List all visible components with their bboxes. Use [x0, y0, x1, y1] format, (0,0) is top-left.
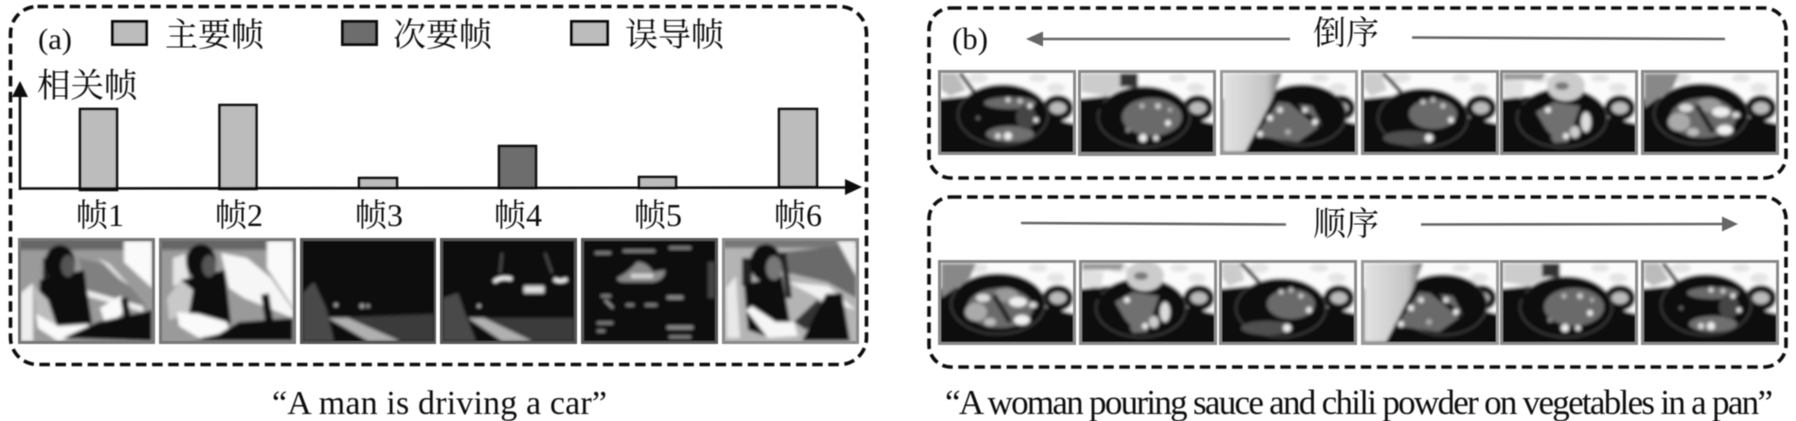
x labels: 帧4 [494, 197, 542, 233]
x labels [76, 197, 822, 233]
pan frame f5 [1500, 260, 1638, 345]
caption (a): “A man is driving a car” [272, 385, 607, 421]
panel (b): forward order [929, 197, 1786, 367]
video frames: driving [18, 238, 859, 344]
dashed panel border (b, reverse) [929, 8, 1786, 178]
legend text: misleading frame: 误导帧 [625, 17, 725, 54]
legend [112, 17, 725, 54]
frame thumbnail 1 [18, 238, 155, 344]
x labels: 帧6 [774, 197, 822, 233]
x labels: 帧2 [215, 197, 263, 233]
bar: frame 5 [639, 177, 676, 188]
panel (a): related frames chart [10, 6, 866, 364]
bar: frame 4 [499, 146, 536, 188]
x labels: 帧5 [634, 197, 682, 233]
x axis arrow [19, 179, 862, 195]
line: right segment [1412, 38, 1725, 39]
frame strip: forward [938, 260, 1779, 345]
caption (b): “A woman pouring sauce and chili powder on vegetables in a pan” [945, 383, 1773, 421]
bar: frame 6 [779, 109, 817, 187]
heading: reverse order: 倒序 [1313, 15, 1379, 52]
bar: frame 3 [359, 178, 397, 188]
pan frame f3 [1219, 260, 1357, 345]
label (a): (a) [38, 23, 72, 56]
frame strip: reverse [938, 70, 1779, 156]
frame thumbnail 5 [581, 238, 718, 344]
label (b): (b) [952, 21, 988, 56]
legend text: main frame: 主要帧 [165, 17, 265, 54]
pan frame r2 [1078, 70, 1216, 156]
pan frame f4 [1361, 260, 1499, 345]
frame thumbnail 3 [300, 238, 437, 344]
legend swatch: main frame [112, 22, 146, 44]
bar: frame 2 [220, 105, 256, 189]
frame thumbnail 2 [159, 238, 296, 344]
pan frame r4 [1361, 70, 1499, 155]
pan frame r6 [1641, 70, 1779, 155]
pan frame r3 [1220, 70, 1358, 155]
dashed panel border (b, forward) [929, 197, 1786, 367]
legend text: secondary frame: 次要帧 [393, 17, 493, 54]
pan frame f1 [938, 260, 1076, 345]
legend swatch: secondary frame [342, 22, 376, 44]
dashed panel border (a) [10, 6, 866, 364]
pan frame f6 [1641, 260, 1779, 345]
x labels: 帧1 [76, 197, 124, 233]
pan frame r1 [938, 70, 1076, 155]
frame thumbnail 4 [440, 238, 577, 344]
line: left segment [1021, 223, 1286, 224]
bar: frame 1 [80, 109, 117, 190]
panel (b): reverse order [929, 8, 1786, 178]
arrow: rightwards [1421, 216, 1738, 232]
legend swatch: misleading frame [572, 22, 608, 44]
y axis label: 相关帧 [37, 68, 138, 105]
bar chart [12, 68, 862, 233]
x labels: 帧3 [355, 197, 403, 233]
arrow: leftwards [1026, 32, 1290, 46]
frame thumbnail 6 [722, 238, 859, 344]
y axis arrow [12, 81, 28, 190]
pan frame r5 [1500, 70, 1638, 155]
pan frame f2 [1079, 260, 1217, 345]
heading: forward order: 顺序 [1313, 206, 1379, 243]
